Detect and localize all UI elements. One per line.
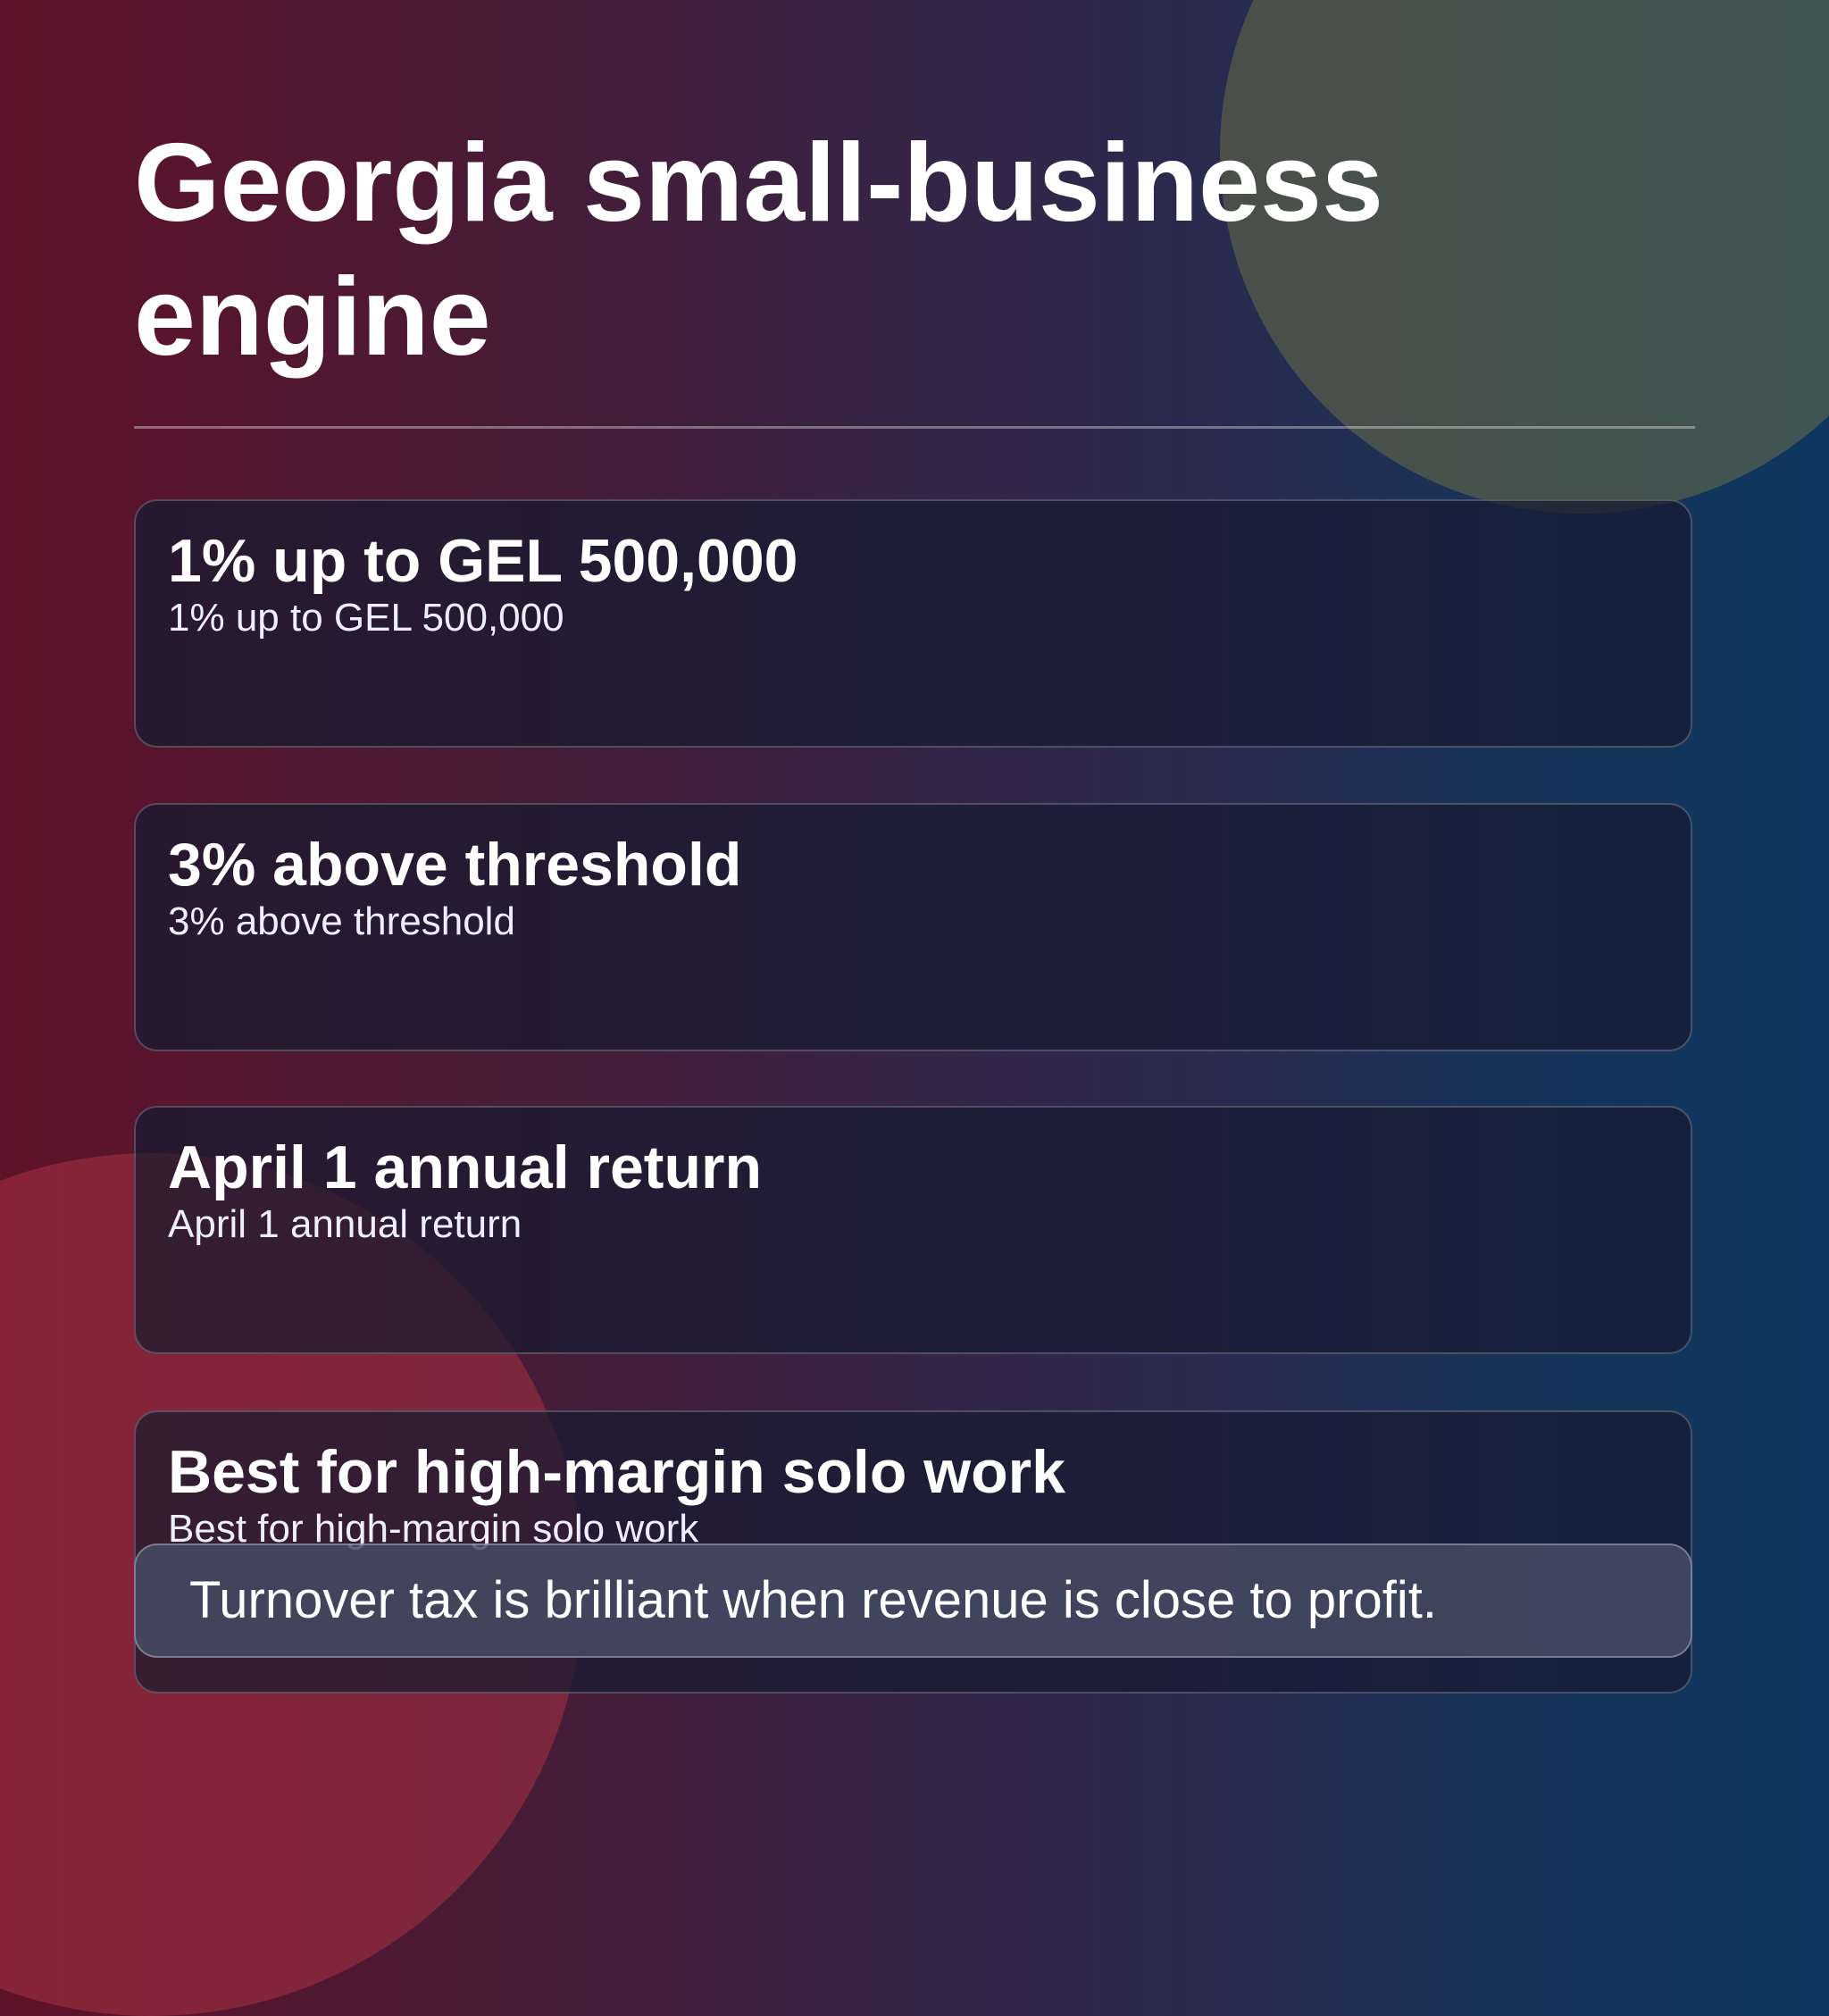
card: 1% up to GEL 500,000: 1% up to GEL 500,000 (168, 527, 798, 595)
card: Best for high-margin solo work: Best for high-margin solo work (168, 1438, 1065, 1506)
card: 3% above threshold: 3% above threshold (168, 899, 515, 943)
card: 3% above threshold (134, 803, 1692, 1051)
card: Best for high-margin solo work: Best for high-margin solo work (168, 1507, 698, 1551)
title: Georgia small-business (134, 121, 1383, 245)
title: engine (134, 255, 491, 379)
card: 1% up to GEL 500,000 (134, 499, 1692, 748)
title (134, 121, 1383, 379)
callout (134, 1543, 1692, 1658)
card: April 1 annual return (134, 1106, 1692, 1354)
card: 3% above threshold: 3% above threshold (168, 831, 741, 899)
card: April 1 annual return: April 1 annual return (168, 1133, 762, 1201)
decorative circle top-right (1220, 0, 1829, 514)
card: 1% up to GEL 500,000: 1% up to GEL 500,000 (168, 596, 564, 640)
decorative circle bottom-left (0, 1153, 583, 2016)
card: Best for high-margin solo work (134, 1410, 1692, 1694)
card: April 1 annual return: April 1 annual return (168, 1202, 522, 1246)
callout: Turnover tax is brilliant when revenue is close to profit. (189, 1571, 1437, 1629)
